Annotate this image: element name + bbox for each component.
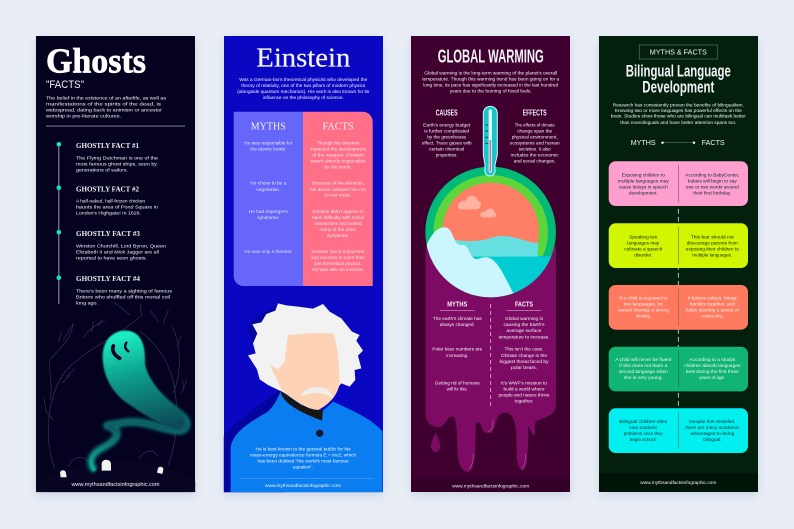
card 5: begin school. — [630, 437, 657, 443]
card 4 — [609, 347, 748, 391]
fact 1: most famous ghost ships, seen by — [76, 162, 158, 168]
myths heading — [440, 300, 474, 311]
tag: myths and facts: MYTHS & FACTS — [650, 50, 707, 57]
shoulders — [231, 392, 383, 492]
card 3: families together, and — [690, 302, 735, 308]
facts column: wasn't directly responsible — [310, 159, 366, 165]
intro text — [422, 71, 560, 95]
footer band — [411, 478, 570, 492]
intro text: temperature. Though this warming trend has been going on for a — [422, 77, 560, 83]
card 3: helps develop a sense of — [686, 308, 739, 314]
card 1: Exposing children to — [622, 173, 665, 179]
illustration: earth and thermometer — [422, 106, 562, 303]
title: Ghosts: Ghosts — [46, 42, 146, 81]
facts column: symptoms. — [327, 233, 349, 239]
effects: societies. It also — [519, 146, 551, 152]
facts text — [498, 316, 550, 404]
card 1: According to BabyCenter, — [685, 173, 739, 179]
facts column: many of the other — [320, 227, 357, 233]
website url: www.mythsandfactsinfographic.com — [265, 483, 341, 489]
intro text: widespread, dating back to animism or ancestor — [46, 108, 162, 114]
facts text: average surface — [506, 328, 542, 334]
earth — [425, 166, 556, 298]
causes: by the greenhouse — [427, 134, 467, 140]
causes: effect. Trace gases with — [422, 140, 472, 146]
facts heading: FACTS — [515, 300, 533, 309]
card 5: there are many academic — [685, 425, 740, 431]
card 3: If a child is exposed to — [619, 296, 668, 302]
fact 4: There's been many a sighting of famous — [76, 288, 173, 294]
card 2 — [609, 223, 748, 268]
intro text: The belief in the existence of an afterlife, as well as — [46, 96, 167, 102]
myths and facts legend — [631, 138, 725, 147]
portrait shadow — [224, 307, 285, 492]
timeline — [56, 142, 61, 304]
card 3 — [609, 285, 748, 330]
fact 1 — [76, 142, 158, 174]
fact 2: London's Highgate! In 1626. — [76, 210, 141, 216]
fact 4: long ago. — [76, 300, 98, 306]
closing text: equation". — [293, 465, 313, 471]
card 4: According to a studys — [689, 357, 736, 363]
thermometer — [483, 106, 497, 176]
facts text: build a world where — [504, 386, 545, 392]
myths and facts legend: FACTS — [702, 138, 725, 147]
card 5: have academic — [629, 425, 658, 431]
fact 2: GHOSTLY FACT #2 — [76, 186, 139, 194]
fact 4 — [76, 275, 173, 306]
purple dripping shape — [426, 247, 556, 472]
facts text: Climate change is the — [501, 353, 547, 359]
card 2: This fear should not — [691, 234, 734, 240]
fact 3: Elizabeth II and Mick Jagger are all — [76, 250, 159, 256]
effects: The effects of climate — [515, 122, 555, 128]
intro text — [237, 77, 370, 101]
facts column: He was also an inventor. — [312, 267, 364, 273]
causes: certain chemical — [429, 146, 464, 152]
facts text: polar bears. — [511, 365, 537, 371]
illustration: ghost in graveyard — [36, 302, 195, 492]
myths text: The earth's climate has — [433, 316, 482, 322]
causes: is further complicated — [424, 128, 470, 134]
moustache — [301, 387, 333, 398]
intro text: than monolinguals and have better attention spans too. — [620, 120, 736, 126]
trees — [44, 302, 187, 468]
fact 3 — [76, 230, 166, 262]
card 3: It fosters culture, brings — [688, 296, 737, 302]
subtitle: FACTS: "FACTS" — [46, 79, 84, 91]
card 3: cannot develop a strong — [618, 308, 669, 314]
facts text: Global warming is — [505, 316, 544, 322]
card 3: community. — [701, 314, 724, 320]
panel: Bilingual Language Development — [599, 36, 758, 492]
effects: ecosystems and human — [510, 140, 560, 146]
card 5: Bilingual children often — [619, 419, 668, 425]
card 3: identity. — [636, 314, 651, 320]
facts column: Because of his ailments, — [312, 181, 364, 187]
facts text: causing the Earth's — [504, 322, 545, 328]
card 1: multiple languages may — [618, 179, 669, 185]
closing text: has been dubbed "the world's most famous — [258, 459, 349, 465]
facts text: biggest threat faced by — [500, 359, 549, 365]
card 4: children absorb languages — [684, 363, 741, 369]
hill — [36, 482, 196, 492]
myths text — [432, 316, 483, 392]
card 5: advantages to being — [690, 431, 735, 437]
myths heading: MYTHS — [447, 300, 467, 309]
fact 1: The Flying Dutchman is one of the — [76, 156, 158, 162]
panel: Global Warming — [411, 36, 570, 492]
effects: EFFECTS — [523, 109, 547, 118]
myths column — [234, 112, 303, 286]
myths column: vegetarian. — [256, 187, 280, 193]
ghost body — [103, 331, 185, 429]
fact 1: generations of sailors. — [76, 168, 128, 174]
collar — [280, 391, 323, 421]
myths column: syndrome. — [257, 215, 279, 221]
facts column: his doctor advised him not — [310, 187, 367, 193]
closing text: mass-energy equivalence formula E = mc2, which — [250, 453, 356, 459]
closing text — [250, 447, 356, 471]
face — [270, 333, 340, 410]
card 4: she is very young. — [624, 375, 663, 381]
intro text — [46, 96, 167, 120]
card 4: A child will never be fluent — [615, 357, 672, 363]
facts heading — [507, 300, 541, 311]
card 5: Despite this misbelief, — [689, 419, 735, 425]
intro text: influence on the philosophy of science. — [263, 95, 344, 101]
facts column: and success in more than — [311, 255, 365, 261]
title: Global Warming: GLOBAL WARMING — [438, 46, 544, 67]
fact 3: reported to have seen ghosts. — [76, 256, 147, 262]
myths text: Getting rid of humans — [435, 380, 480, 386]
card 2: cultivate a speech — [624, 246, 663, 252]
card 1: one or two words around — [686, 185, 739, 191]
facts text: temperature to increase. — [498, 334, 550, 340]
facts text: people and nature thrive — [498, 392, 550, 398]
effects: physical environment, — [512, 134, 558, 140]
myths text: always changed. — [440, 322, 475, 328]
title: Bilingual Language Development: Bilingual Language — [626, 63, 731, 81]
myths column: MYTHS — [251, 122, 286, 133]
title: Bilingual Language Development — [626, 63, 731, 97]
intro text: years due to the burning of fossil fuels. — [450, 89, 532, 95]
intro text: theory of relativity, one of the two pillars of modern physics — [241, 83, 366, 89]
myths text: increasing. — [446, 353, 468, 359]
intro text: worship in pre-literate cultures. — [46, 114, 121, 120]
card 2: exposing their children to — [686, 246, 739, 252]
illustration: Einstein portrait — [224, 303, 383, 492]
card 4: if she does not learn a — [619, 363, 668, 369]
card 2: languages may — [627, 240, 660, 246]
card 1 — [609, 161, 748, 206]
facts column: to eat meat. — [324, 193, 352, 199]
card 2: disorder. — [634, 252, 652, 258]
tag: myths and facts — [639, 45, 717, 59]
causes: CAUSES — [436, 109, 458, 118]
facts column: Though his theories — [316, 141, 360, 147]
ghost eyes — [113, 343, 128, 358]
myths column: the atomic bomb. — [250, 147, 286, 153]
card 1: cause delays in speech — [619, 185, 668, 191]
website url: www.mythsandfactsinfographic.com — [452, 483, 529, 489]
intro text: (alongside quantum mechanics). His work is also known for its — [237, 89, 370, 95]
fact 4: GHOSTLY FACT #4 — [76, 275, 140, 283]
facts column: Einstein found enjoyment — [312, 249, 365, 255]
myths text: Polar bear numbers are — [432, 347, 483, 353]
card 3: two languages, he — [624, 302, 663, 308]
card 5: bilingual. — [703, 437, 721, 443]
effects: includes the economic — [511, 152, 559, 158]
fact 2 — [76, 186, 158, 216]
card 4: years of age. — [699, 375, 725, 381]
title: Bilingual Language Development: Development — [642, 79, 715, 97]
fact 2: A half-naked, half-frozen chicken — [76, 198, 145, 204]
intro text: Was a German-born theoretical physicist who developed the — [239, 77, 368, 83]
card 2: discourage parents from — [687, 240, 738, 246]
myths and facts legend: MYTHS — [631, 138, 656, 147]
facts column: for the bomb. — [324, 165, 352, 171]
facts text: It's WWF's mission to — [501, 380, 547, 386]
card 4: second language when — [619, 369, 668, 375]
intro text: long time, its pace has significantly increased in the last hundred — [423, 83, 559, 89]
ghost tail — [88, 416, 188, 472]
causes: Earth's energy budget — [423, 122, 471, 128]
card 5 — [609, 408, 748, 453]
intro text: Knowing two or more languages has powerful effects on the — [615, 108, 742, 114]
intro text: Research has consistently proven the benefits of bilingualism. — [613, 102, 744, 108]
facts column: impacted the development — [310, 147, 367, 153]
fact 3: Winston Churchill, Lord Byron, Queen — [76, 244, 166, 250]
causes — [422, 109, 472, 158]
button — [316, 430, 323, 437]
facts column: Einstein didn't appear to — [312, 209, 364, 215]
facts column — [303, 112, 373, 286]
intro text — [611, 102, 746, 126]
card 1: development. — [629, 191, 658, 197]
website url: www.mythsandfactsinfographic.com — [70, 482, 160, 488]
ghost tail glow — [91, 387, 187, 471]
facts column: just theoretical physics. — [314, 261, 362, 267]
card 2: Speaking two — [629, 234, 658, 240]
intro text: Global warming is the long-term warming of the planet's overall — [424, 71, 557, 77]
effects: change span the — [517, 128, 553, 134]
website url: www.mythsandfactsinfographic.com — [640, 480, 716, 486]
myths column: He was responsible for — [244, 141, 293, 147]
fact 1: GHOSTLY FACT #1 — [76, 142, 139, 150]
effects: and social changes. — [514, 158, 556, 164]
panel: Ghosts — [36, 36, 195, 492]
facts text: This isn't the case. — [504, 347, 544, 353]
title: Einstein: Einstein — [256, 43, 351, 73]
myths column: He chose to be a — [250, 181, 287, 187]
footer band — [599, 473, 758, 492]
facts column: FACTS — [322, 122, 354, 133]
facts column: interactions and lacked — [314, 221, 362, 227]
intro text: manifestations of the spirits of the dead, is — [46, 102, 162, 108]
facts text: together. — [514, 398, 534, 404]
myths column: He was only a theorist. — [244, 249, 292, 255]
myths column: He had Asperger's — [249, 209, 288, 215]
causes: properties. — [436, 152, 458, 158]
effects — [510, 109, 560, 164]
card 4: best during the first three — [686, 369, 739, 375]
fact 3: GHOSTLY FACT #3 — [76, 230, 140, 238]
intro text: brain. Studies show those who are bilingual can multitask better — [611, 114, 746, 120]
tombstones — [60, 460, 163, 477]
facts column: have difficulty with social — [312, 215, 364, 221]
card 2: multiple languages. — [692, 252, 732, 258]
closing text: He is best known to the general public for his — [256, 447, 351, 453]
facts column: of the weapon. Einstein — [312, 153, 364, 159]
fact 4: Britons who shuffled off this mortal coil — [76, 294, 170, 300]
card 1: their first birthday. — [693, 191, 731, 197]
panel: Einstein — [224, 36, 383, 492]
hair — [248, 303, 363, 403]
fact 2: haunts the area of Pond Square in — [76, 204, 158, 210]
panel shadows — [36, 40, 758, 496]
myths text: will fix this. — [447, 386, 468, 392]
card 5: problems once they — [624, 431, 663, 437]
card 1: babies will begin to say — [688, 179, 737, 185]
